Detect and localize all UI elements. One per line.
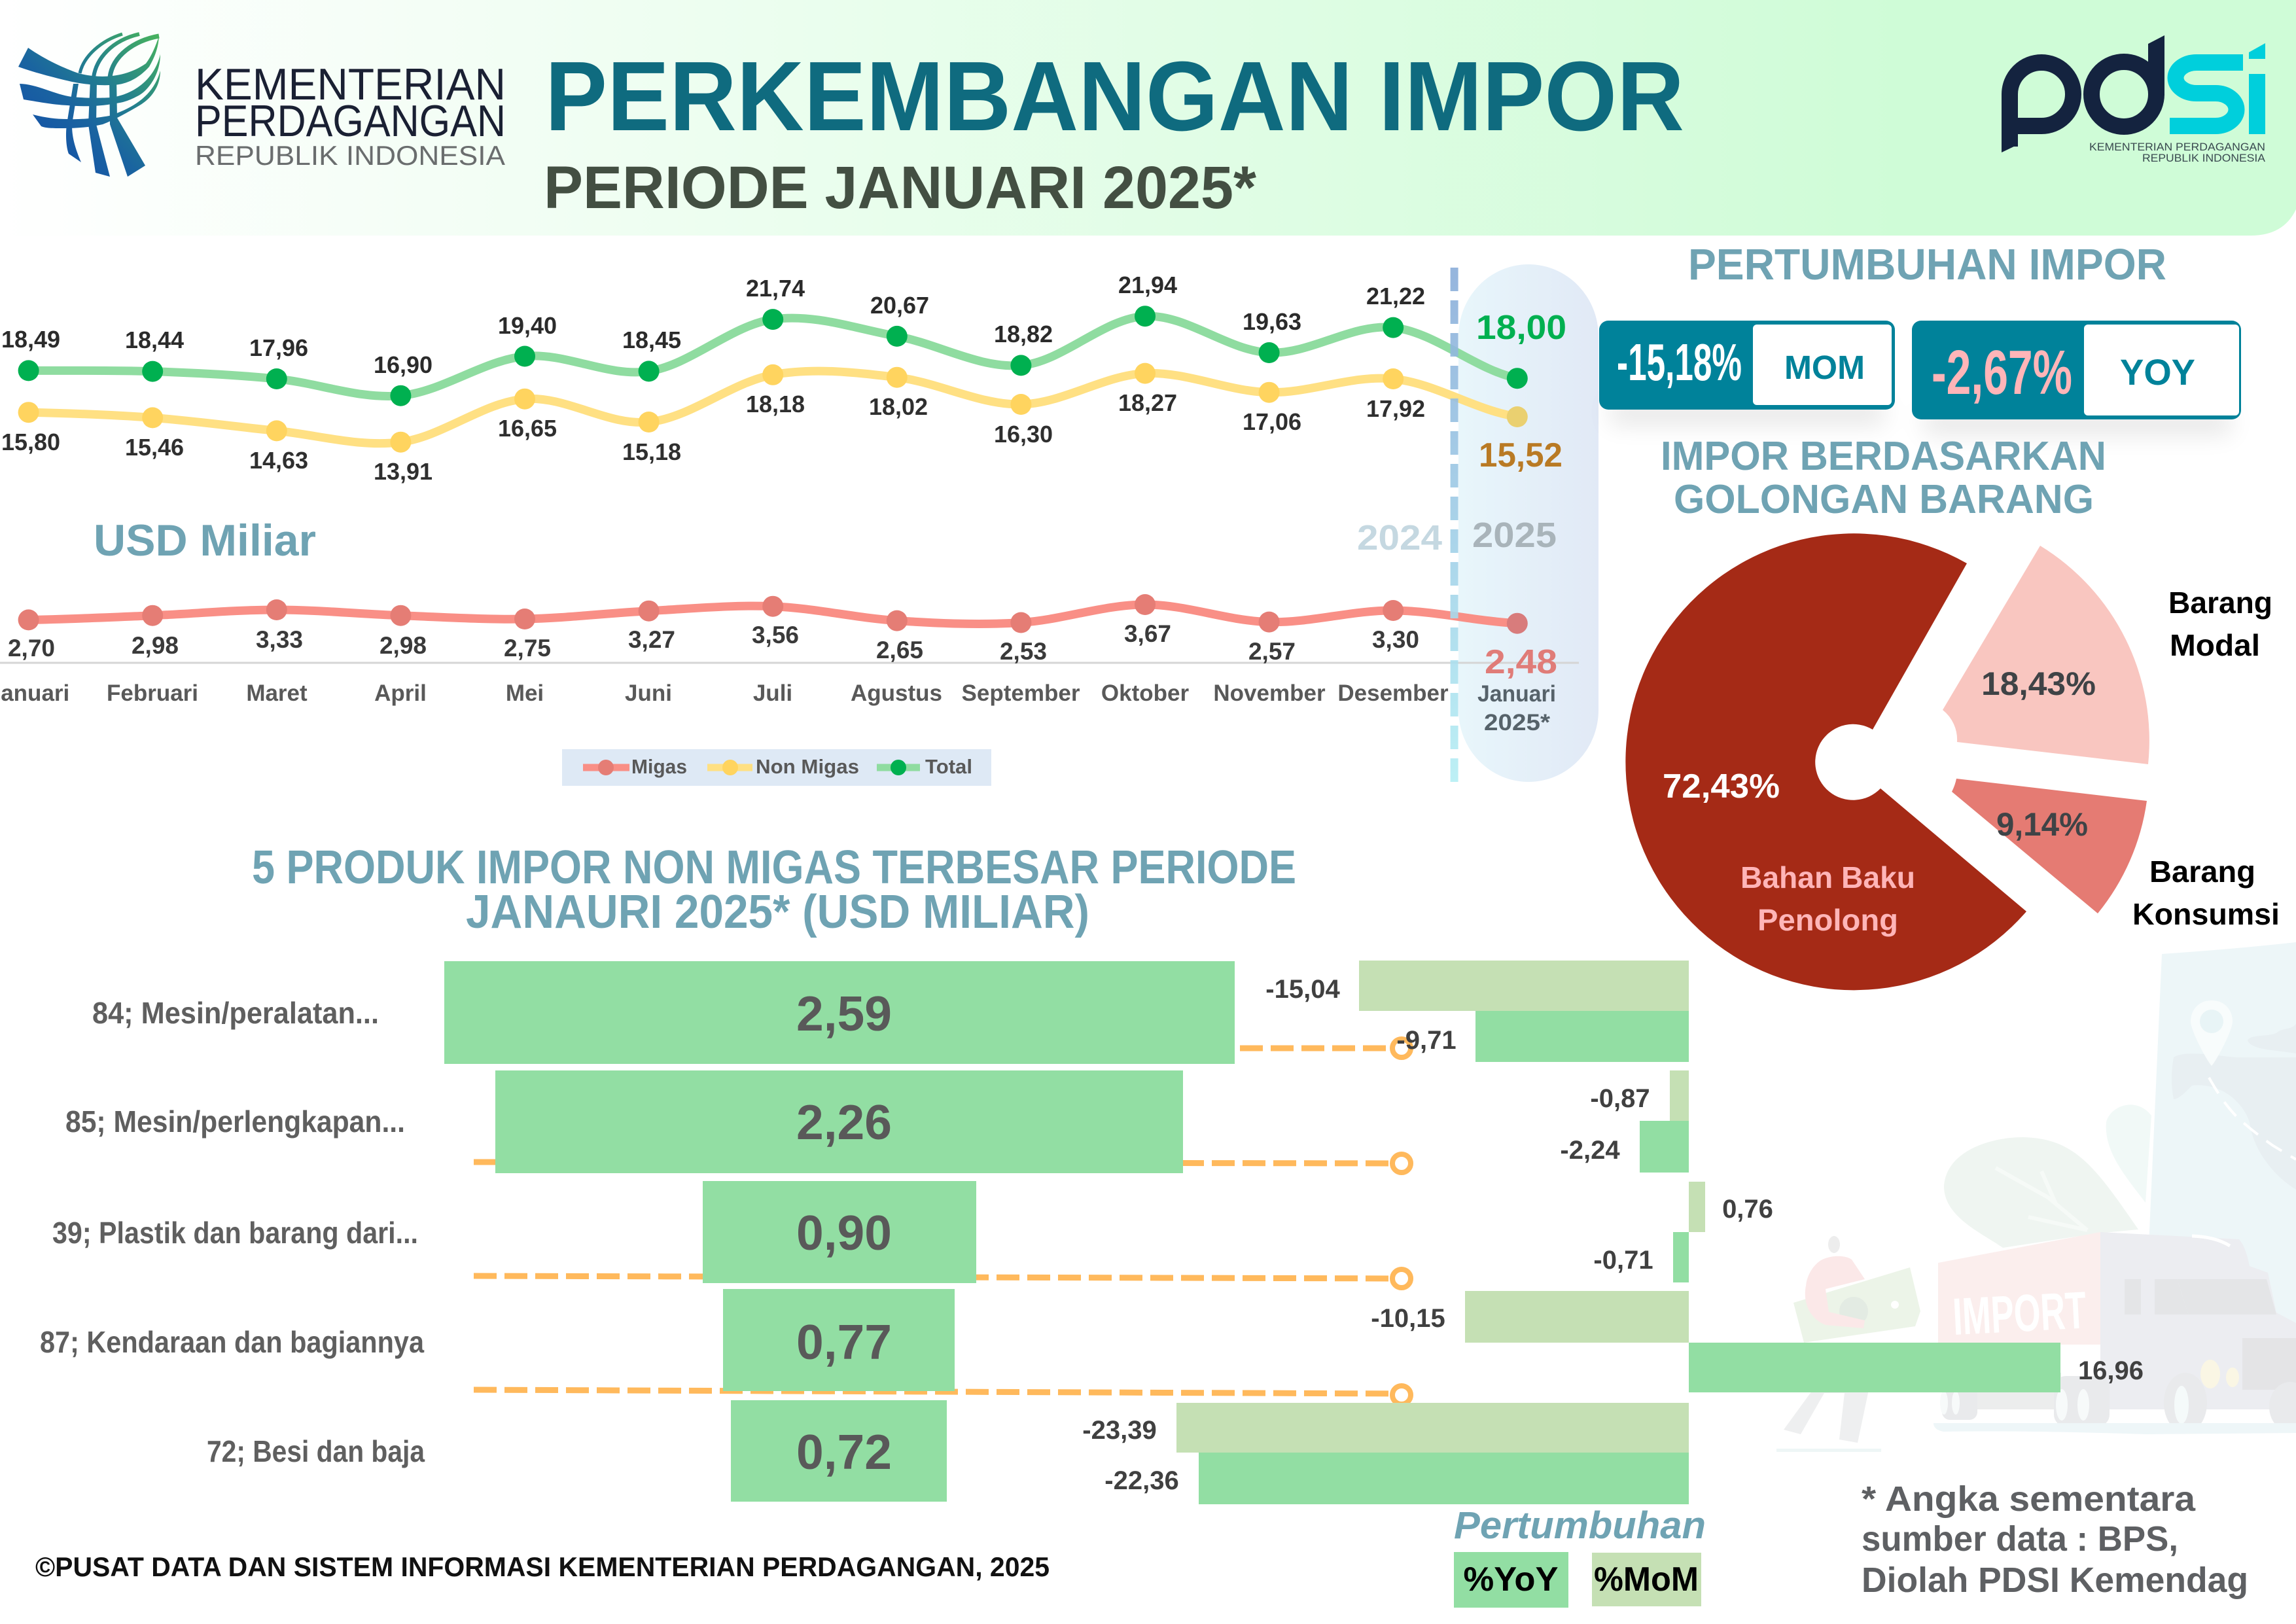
pie labels: Barang [2149, 855, 2255, 889]
data labels: Total: 18,44 [125, 327, 184, 353]
pie slice: bahan baku penolong [1625, 533, 2026, 990]
heading: 5 produk impor: 5 PRODUK IMPOR NON MIGAS TERBESAR PERIODE [252, 841, 1296, 894]
data labels: Migas: 3,56 [752, 622, 799, 648]
data labels: Non Migas: 15,46 [125, 434, 184, 461]
month axis labels: April [374, 680, 427, 706]
month axis labels: Oktober [1101, 680, 1189, 706]
source footnote: * Angka sementara [1862, 1479, 2196, 1519]
logo text: REPUBLIK INDONESIA [195, 140, 505, 171]
data labels: Total: 18,82 [994, 321, 1053, 347]
highlight pill: January 2025 [1458, 264, 1598, 782]
growth legend: MoM: %MoM [1594, 1561, 1699, 1598]
pie labels: 9,14% [1996, 806, 2088, 843]
subtitle: PERIODE JANUARI 2025* [544, 154, 1256, 221]
card: YoY growth: YOY [2120, 351, 2195, 393]
panel: pertumbuhan impor [1599, 240, 2241, 435]
line series: Total [18, 306, 1528, 406]
year label 2024: 2024 [1357, 518, 1442, 557]
data labels: Total: 20,67 [870, 292, 929, 319]
data labels: Non Migas: 14,63 [249, 447, 308, 474]
data labels: Migas: 3,27 [628, 626, 675, 653]
data labels: Non Migas: 15,80 [1, 429, 60, 455]
month axis labels: Juli [753, 680, 792, 706]
heading: golongan barang: GOLONGAN BARANG [1674, 477, 2094, 522]
data labels: Total: 16,90 [374, 351, 433, 378]
growth legend title: Pertumbuhan [1454, 1504, 1706, 1547]
chart axis line [0, 662, 1579, 663]
pie slice: barang modal [1943, 546, 2149, 764]
heading: pertumbuhan impor: PERTUMBUHAN IMPOR [1688, 240, 2166, 289]
data labels: Migas: 2,98 [132, 632, 179, 659]
icon: Kementerian Perdagangan emblem [18, 34, 160, 177]
source footnote: Diolah PDSI Kemendag [1862, 1561, 2248, 1600]
copyright: ©PUSAT DATA DAN SISTEM INFORMASI KEMENTERIAN PERDAGANGAN, 2025 [35, 1551, 1050, 1582]
data labels: Migas: 2,65 [876, 637, 923, 663]
data labels: Total [1, 272, 1425, 378]
line series: Non Migas [18, 363, 1528, 453]
icon: PDSI mark [2002, 35, 2265, 152]
product category labels: 72; Besi dan baja [207, 1434, 425, 1468]
data labels: Non Migas [1, 389, 1425, 485]
growth bar values: -9,71 [1396, 1026, 1457, 1055]
month axis labels: Agustus [851, 680, 942, 706]
growth bar values: -2,24 [1560, 1136, 1620, 1165]
card: YoY growth [1912, 321, 2241, 419]
logo: Kementerian Perdagangan [18, 34, 506, 177]
growth legend: YoY: %YoY [1463, 1561, 1559, 1598]
data labels: Non Migas: 18,27 [1118, 389, 1177, 416]
funnel bar values: 2,59 [796, 986, 892, 1041]
data labels: Non Migas: 17,92 [1366, 395, 1425, 422]
growth legend: MoM [1592, 1553, 1701, 1606]
chart legend: Migas [631, 755, 687, 778]
month axis labels: Maret [246, 680, 308, 706]
logo text [195, 60, 506, 171]
heading: 5 produk impor [252, 841, 1296, 938]
title: PERKEMBANGAN IMPOR [545, 41, 1684, 151]
product category labels: 39; Plastik dan barang dari... [52, 1216, 418, 1250]
connector end markers [1392, 1039, 1411, 1404]
month axis labels: Januari [1477, 681, 1556, 707]
growth bar values: 0,76 [1722, 1195, 1773, 1224]
PDSI caption: REPUBLIK INDONESIA [2142, 152, 2266, 164]
data labels: Migas [8, 620, 1419, 665]
data labels: Total: 19,63 [1243, 308, 1301, 335]
pie labels: 18,43% [1981, 665, 2096, 702]
data labels: Total: 17,96 [249, 334, 308, 361]
pie labels: Bahan Baku [1740, 860, 1915, 894]
data labels: Non Migas: 18,18 [746, 391, 805, 417]
product category labels [40, 996, 425, 1468]
month axis labels: November [1213, 680, 1326, 706]
data labels: Non Migas: 13,91 [374, 458, 433, 485]
source footnote: sumber data : BPS, [1862, 1519, 2178, 1559]
growth bar values: -23,39 [1082, 1416, 1157, 1445]
month axis labels: Juni [625, 680, 672, 706]
funnel bar values [796, 986, 892, 1479]
divider: 2024 / 2025 dashed line [1451, 268, 1458, 782]
logo text: KEMENTERIAN [195, 60, 506, 109]
month axis labels: Mei [506, 680, 544, 706]
unit label: USD Miliar [94, 516, 316, 565]
logo: PDSI [2002, 35, 2266, 164]
pie labels [1663, 586, 2280, 937]
pie labels: Penolong [1757, 903, 1898, 937]
data labels: Total: 21,74 [746, 275, 805, 302]
pie labels: 72,43% [1663, 768, 1780, 805]
growth bar values: -0,87 [1590, 1084, 1650, 1113]
growth legend: YoY [1454, 1552, 1568, 1608]
pie labels: Barang [2168, 586, 2272, 620]
card: MoM growth [1599, 321, 1895, 410]
growth bar values: -0,71 [1593, 1246, 1653, 1275]
card: MoM growth: MOM [1784, 349, 1865, 386]
growth bars: YoY [1199, 1011, 2060, 1504]
growth bar values: -15,04 [1265, 975, 1340, 1004]
panel: line chart monthly imports [0, 264, 1598, 786]
chart legend: Non Migas [756, 755, 859, 778]
highlight value: non migas 15,52: 15,52 [1479, 436, 1563, 474]
highlight value: migas 2,48: 2,48 [1485, 643, 1557, 681]
funnel bar values: 0,77 [796, 1315, 892, 1369]
growth bar values: -22,36 [1104, 1466, 1179, 1495]
data labels: Total: 21,22 [1366, 283, 1425, 309]
growth bar values: 16,96 [2078, 1356, 2144, 1385]
month axis labels: Desember [1337, 680, 1449, 706]
funnel bar values: 2,26 [796, 1095, 892, 1150]
pie labels: Konsumsi [2132, 897, 2280, 931]
data labels: Total: 18,49 [1, 326, 60, 353]
funnel bar values: 0,72 [796, 1424, 892, 1479]
funnel bars: import value [444, 961, 1235, 1502]
data labels: Migas: 2,75 [504, 635, 551, 662]
funnel bar values: 0,90 [796, 1205, 892, 1260]
dashed connector lines [474, 1048, 1402, 1394]
month axis labels: 2025* [1484, 710, 1550, 735]
month axis labels [0, 680, 1556, 735]
chart legend: Total [925, 755, 972, 778]
data labels: Migas: 3,67 [1124, 620, 1171, 647]
data labels: Migas: 2,70 [8, 635, 55, 662]
panel: 5 produk impor non migas [40, 841, 2144, 1608]
product category labels: 84; Mesin/peralatan... [92, 996, 379, 1030]
data labels: Non Migas: 16,65 [498, 415, 557, 442]
panel: impor berdasarkan golongan barang [1625, 434, 2280, 990]
background illustration: truck, map and person [1776, 942, 2296, 1452]
data labels: Migas: 3,33 [256, 626, 303, 653]
data labels: Total: 18,45 [622, 327, 681, 353]
month axis labels: September [962, 680, 1080, 706]
source footnote [1862, 1479, 2248, 1600]
data labels: Migas: 2,98 [380, 632, 427, 659]
heading: 5 produk impor: JANAURI 2025* (USD MILIAR) [466, 886, 1089, 938]
header banner [0, 0, 2296, 236]
heading: golongan barang: IMPOR BERDASARKAN [1661, 434, 2106, 479]
data labels: Total: 19,40 [498, 312, 557, 339]
data labels: Non Migas: 17,06 [1243, 408, 1301, 435]
growth bar values: -10,15 [1371, 1304, 1445, 1333]
data labels: Migas: 3,30 [1372, 626, 1419, 653]
logo text: PERDAGANGAN [195, 96, 506, 146]
data labels: Non Migas: 18,02 [869, 393, 928, 420]
growth bars: MoM [1176, 961, 1705, 1453]
data labels: Total: 21,94 [1118, 272, 1177, 298]
year label 2025: 2025 [1472, 516, 1557, 555]
highlight value: total 18,00: 18,00 [1476, 309, 1566, 347]
product category labels: 85; Mesin/perlengkapan... [65, 1104, 405, 1139]
heading: golongan barang [1661, 434, 2106, 522]
line series: Migas [18, 594, 1528, 634]
product category labels: 87; Kendaraan dan bagiannya [40, 1325, 424, 1359]
card: MoM growth: -15,18% [1617, 333, 1742, 391]
data labels: Migas: 2,57 [1248, 638, 1296, 665]
growth bar values [1082, 975, 2144, 1495]
data labels: Non Migas: 16,30 [994, 421, 1053, 448]
data labels: Non Migas: 15,18 [622, 438, 681, 465]
pie slice: barang konsumsi [1952, 779, 2147, 913]
card: YoY growth: -2,67% [1932, 338, 2072, 408]
background illustration: truck, map and person: IMPORT [1951, 1280, 2088, 1346]
month axis labels: Februari [107, 680, 198, 706]
box shadows [1610, 399, 2231, 435]
data labels: Migas: 2,53 [1000, 638, 1047, 665]
PDSI caption [2089, 141, 2266, 164]
PDSI caption: KEMENTERIAN PERDAGANGAN [2089, 141, 2265, 153]
pie labels: Modal [2170, 628, 2260, 662]
chart legend [562, 749, 991, 786]
